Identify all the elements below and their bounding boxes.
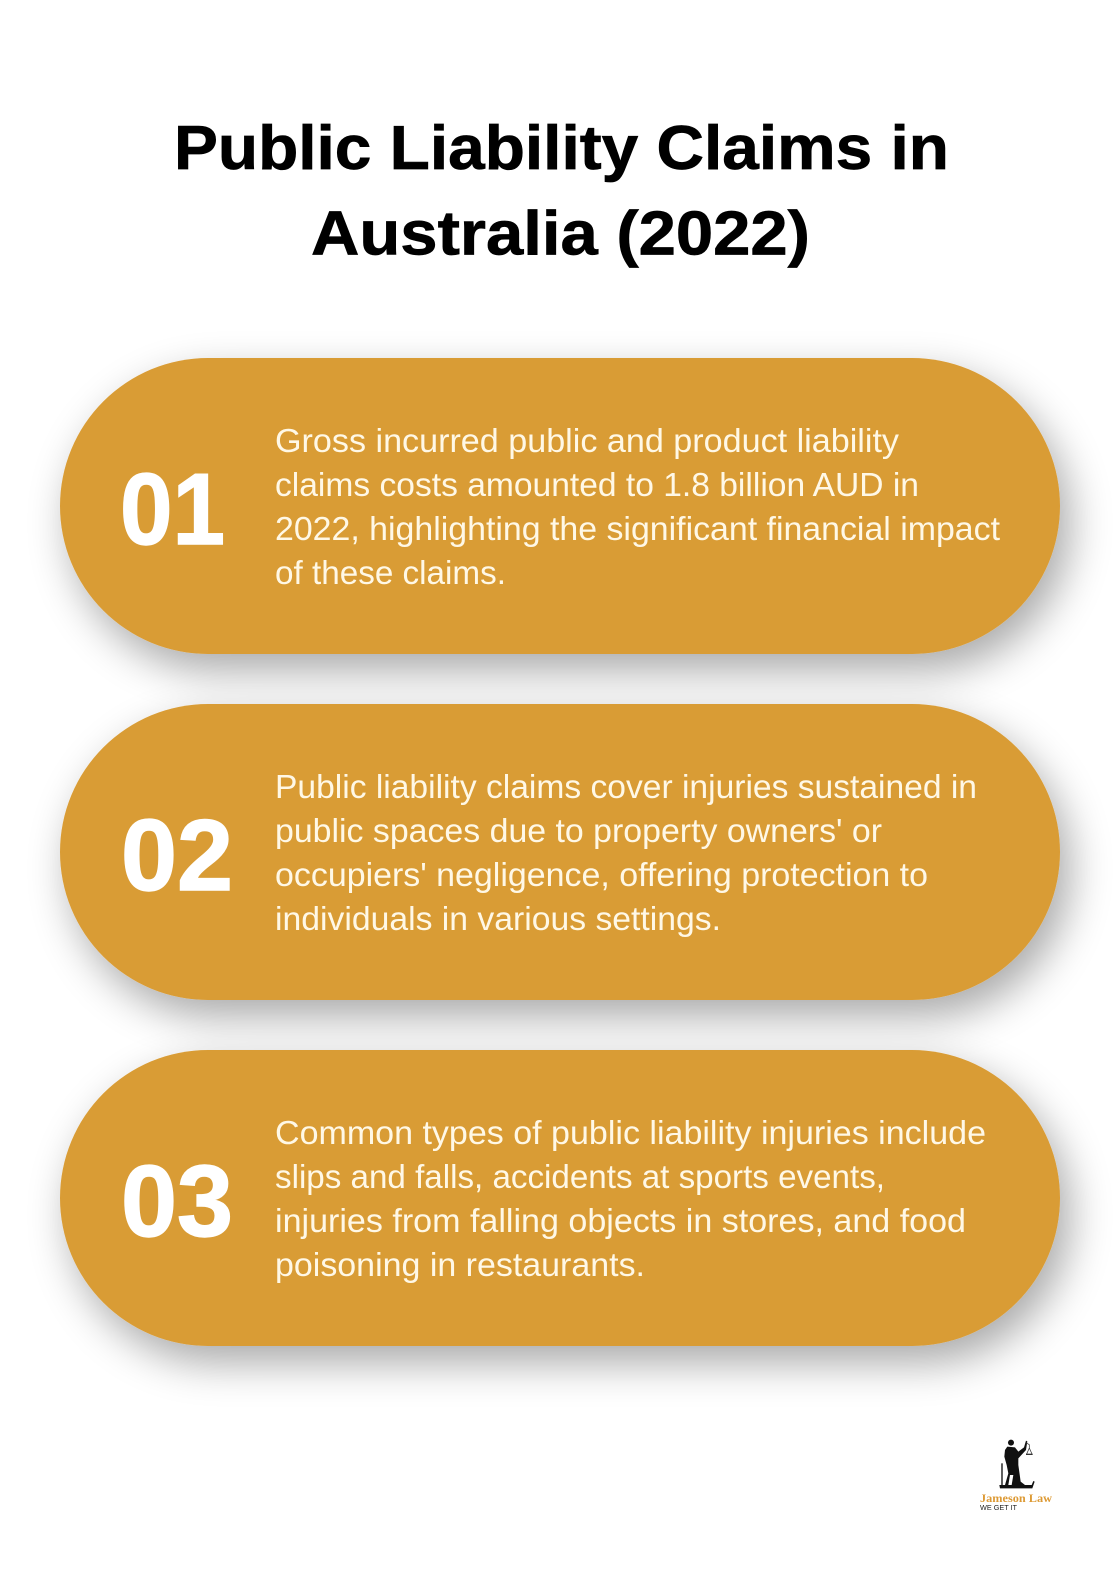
logo: Jameson Law	[980, 1440, 1053, 1512]
card 01 text: Gross incurred public and product liability	[275, 422, 900, 459]
card 03 background pill	[60, 1050, 1060, 1346]
card 02 text: individuals in various settings.	[275, 900, 721, 937]
title: Australia (2022)	[311, 200, 810, 268]
title: Public Liability Claims in	[174, 114, 949, 183]
logo tagline: WE GET IT	[980, 1505, 1018, 1512]
card 03 number: 03	[121, 1146, 233, 1258]
title	[174, 114, 949, 268]
icon: lady justice	[999, 1440, 1035, 1488]
card 02 text: Public liability claims cover injuries sustained in	[275, 768, 977, 805]
card 02 text	[275, 768, 977, 937]
card 03 text: poisoning in restaurants.	[275, 1246, 645, 1283]
card 02 background pill	[60, 704, 1060, 1000]
logo name: Jameson Law	[980, 1493, 1053, 1505]
card 01 text: claims costs amounted to 1.8 billion AUD in	[275, 466, 919, 503]
card 02 number: 02	[121, 800, 233, 912]
card 02 text: occupiers' negligence, offering protection to	[275, 856, 928, 893]
card 01 text: 2022, highlighting the significant financial impact	[275, 510, 1000, 547]
card 02 text: public spaces due to property owners' or	[275, 812, 882, 849]
card 01 text: of these claims.	[275, 554, 506, 591]
card 01 number: 01	[120, 454, 225, 566]
card 03 text	[275, 1114, 986, 1283]
card 03 text: Common types of public liability injuries include	[275, 1114, 986, 1151]
panel: card 02	[60, 704, 1060, 1000]
card 03 text: slips and falls, accidents at sports events,	[275, 1158, 885, 1195]
card 01 background pill	[60, 358, 1060, 654]
card 03 text: injuries from falling objects in stores, and food	[275, 1202, 966, 1239]
panel: card 01	[60, 358, 1060, 654]
panel: card 03	[60, 1050, 1060, 1346]
card 01 text	[275, 422, 1000, 591]
icon: scales	[1026, 1443, 1033, 1454]
